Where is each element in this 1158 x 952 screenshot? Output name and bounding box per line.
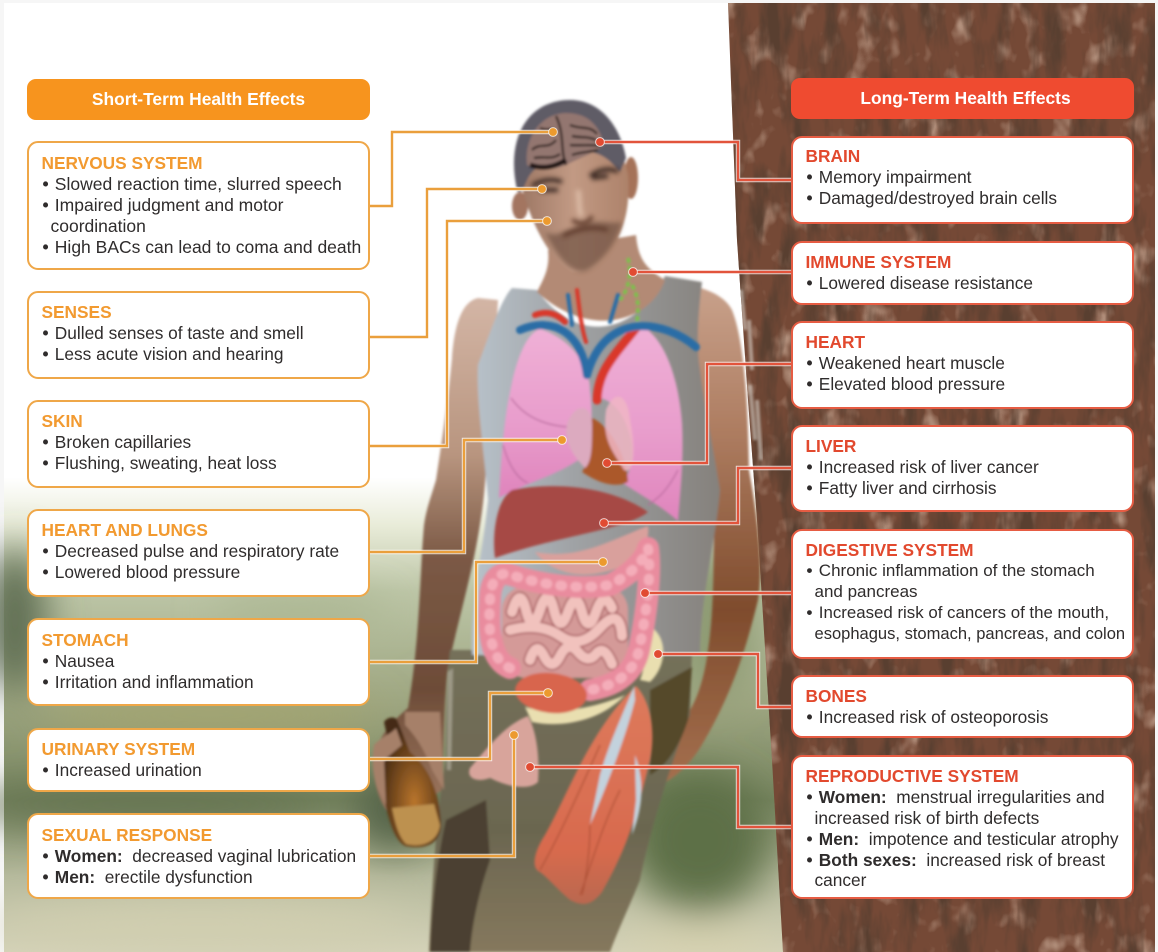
panel: heart and lungs: Lowered blood pressure — [55, 562, 240, 582]
panel: senses — [27, 291, 370, 379]
right arm — [645, 282, 760, 786]
panel: urinary system: URINARY SYSTEM — [42, 739, 195, 759]
panel: immune system — [791, 241, 1134, 305]
panel: heart and lungs: HEART AND LUNGS — [42, 520, 208, 540]
panel: digestive system — [791, 529, 1134, 659]
bark flecks near trunk edge — [741, 290, 761, 460]
connector lines: long-term effects — [526, 138, 791, 827]
panel: stomach — [27, 618, 370, 706]
small intestine — [502, 586, 628, 678]
hair — [514, 100, 626, 192]
thigh muscles — [535, 686, 652, 904]
panel: skin: Flushing, sweating, heat loss — [55, 453, 277, 473]
panel: reproductive system: • — [806, 829, 813, 849]
panel: reproductive system: cancer — [814, 870, 866, 890]
panel: sexual response: • — [42, 846, 49, 866]
heading: Long-Term Health Effects — [791, 78, 1134, 119]
panel: stomach: • — [42, 651, 49, 671]
brain overlay — [527, 113, 604, 169]
panel: sexual response: Women: decreased vaginal lubrication — [55, 846, 356, 866]
panel: brain: Memory impairment — [819, 167, 971, 187]
panel: digestive system: Increased risk of cancers of the mouth, — [819, 603, 1109, 622]
panel: digestive system: • — [806, 561, 812, 580]
panel: heart: • — [806, 374, 813, 394]
panel: heart and lungs: • — [42, 562, 49, 582]
panel: senses: SENSES — [42, 302, 112, 322]
stubble — [545, 222, 622, 271]
connector lines: short-term effects — [370, 128, 607, 856]
panel: sexual response: Men: erectile dysfunction — [55, 867, 253, 887]
thyroid lymph nodes — [620, 258, 638, 322]
panel: sexual response: SEXUAL RESPONSE — [42, 825, 212, 845]
panel: nervous system: coordination — [50, 216, 146, 236]
pelvis bones — [525, 625, 663, 724]
panel: immune system: • — [806, 273, 813, 293]
panel: senses: Dulled senses of taste and smell — [55, 323, 304, 343]
large intestine — [489, 548, 649, 690]
genitals — [469, 716, 539, 787]
panel: urinary system: • — [42, 760, 49, 780]
panel: bones: Increased risk of osteoporosis — [819, 707, 1048, 727]
organs: anatomy overlay — [469, 258, 696, 904]
head and face — [517, 112, 628, 272]
panel: brain: BRAIN — [806, 146, 860, 166]
panel: liver: Increased risk of liver cancer — [819, 457, 1039, 477]
panel: immune system: IMMUNE SYSTEM — [806, 252, 951, 272]
panel: nervous system — [27, 141, 370, 270]
panel: nervous system: Slowed reaction time, slurred speech — [55, 174, 342, 194]
panel: urinary system: Increased urination — [55, 760, 202, 780]
panel: skin: • — [42, 453, 49, 473]
muscle fibres — [540, 745, 620, 895]
panel: brain: Damaged/destroyed brain cells — [819, 188, 1057, 208]
liver — [494, 486, 648, 558]
lung fissures — [503, 398, 678, 505]
panel: senses: • — [42, 323, 49, 343]
panel: heart: Weakened heart muscle — [819, 353, 1005, 373]
panel: skin: Broken capillaries — [55, 432, 191, 452]
panel: digestive system: Chronic inflammation of the stomach — [819, 561, 1095, 580]
tank top — [472, 276, 720, 655]
panel: heart: HEART — [806, 332, 865, 352]
panel: heart: • — [806, 353, 813, 373]
panel: digestive system: • — [806, 603, 812, 622]
heading: Long-Term Health Effects: Long-Term Health Effects — [860, 88, 1071, 108]
right lung — [600, 323, 683, 521]
pocket — [650, 667, 692, 775]
panel: heart and lungs: Decreased pulse and respiratory rate — [55, 541, 339, 561]
panel: brain — [791, 136, 1134, 224]
bladder — [513, 669, 589, 717]
panel: sexual response — [27, 813, 370, 899]
neck and chest — [537, 235, 665, 321]
panel: brain: • — [806, 167, 813, 187]
heading: Short-Term Health Effects — [27, 78, 370, 120]
panel: immune system: Lowered disease resistance — [819, 273, 1033, 293]
panel: skin — [27, 400, 370, 488]
panel: liver: • — [806, 478, 813, 498]
left arm — [374, 298, 498, 820]
panel: heart and lungs — [27, 509, 370, 597]
heading: Short-Term Health Effects: Short-Term Health Effects — [92, 88, 305, 108]
panel: bones — [791, 675, 1134, 738]
man: figure photograph approximation — [373, 100, 760, 952]
panel: sexual response: • — [42, 867, 49, 887]
panel: liver: Fatty liver and cirrhosis — [819, 478, 996, 498]
panel: nervous system: • — [42, 237, 49, 257]
panel: senses: Less acute vision and hearing — [55, 344, 283, 364]
panel: urinary system — [27, 728, 370, 792]
panel: nervous system: NERVOUS SYSTEM — [42, 153, 203, 173]
panel: reproductive system: • — [806, 787, 813, 807]
panel: reproductive system: Women: menstrual irregularities and — [819, 787, 1105, 807]
panel: heart — [791, 321, 1134, 409]
panel: stomach: STOMACH — [42, 630, 129, 650]
panel: stomach: Irritation and inflammation — [55, 672, 254, 692]
aorta and arteries — [535, 290, 636, 400]
panel: senses: • — [42, 344, 49, 364]
pants highlight — [447, 668, 453, 770]
panel: reproductive system: Men: impotence and testicular atrophy — [819, 829, 1118, 849]
panel: liver: • — [806, 457, 813, 477]
panel: reproductive system: Both sexes: increased risk of breast — [819, 850, 1105, 870]
panel: digestive system: esophagus, stomach, pancreas, and colon — [814, 624, 1125, 643]
panel: bones: • — [806, 707, 813, 727]
panel: stomach: • — [42, 672, 49, 692]
panel: digestive system: and pancreas — [814, 582, 918, 601]
panel: reproductive system: increased risk of birth defects — [814, 808, 1039, 828]
panel: reproductive system — [791, 755, 1134, 899]
panel: heart and lungs: • — [42, 541, 49, 561]
right ear — [624, 157, 638, 199]
eyes and brows — [532, 169, 618, 190]
panel: nervous system: Impaired judgment and motor — [55, 195, 283, 215]
tree trunk — [728, 3, 1155, 952]
panel: heart: Elevated blood pressure — [819, 374, 1005, 394]
panel: nervous system: • — [42, 195, 49, 215]
lung highlight over heart — [605, 397, 633, 471]
left lung — [499, 329, 592, 498]
panel: skin: • — [42, 432, 49, 452]
left ear — [512, 192, 528, 220]
bottle — [382, 718, 441, 847]
panel: bones: BONES — [806, 686, 867, 706]
panel: nervous system: High BACs can lead to coma and death — [55, 237, 361, 257]
veins — [520, 295, 696, 375]
nose and mouth — [563, 190, 608, 236]
pants — [429, 650, 692, 952]
dark inner leg — [430, 800, 490, 952]
panel: brain: • — [806, 188, 813, 208]
muscle tendons — [590, 686, 641, 835]
pericardium — [566, 408, 592, 468]
panel: reproductive system: • — [806, 850, 813, 870]
panel: liver: LIVER — [806, 436, 856, 456]
panel: nervous system: • — [42, 174, 49, 194]
panel: reproductive system: REPRODUCTIVE SYSTEM — [806, 766, 1019, 786]
panel: skin: SKIN — [42, 411, 83, 431]
panel: liver — [791, 425, 1134, 512]
hand on bottle — [373, 712, 444, 805]
panel: digestive system: DIGESTIVE SYSTEM — [806, 540, 974, 560]
panel: stomach: Nausea — [55, 651, 114, 671]
stomach — [535, 526, 648, 574]
heart — [582, 418, 628, 485]
